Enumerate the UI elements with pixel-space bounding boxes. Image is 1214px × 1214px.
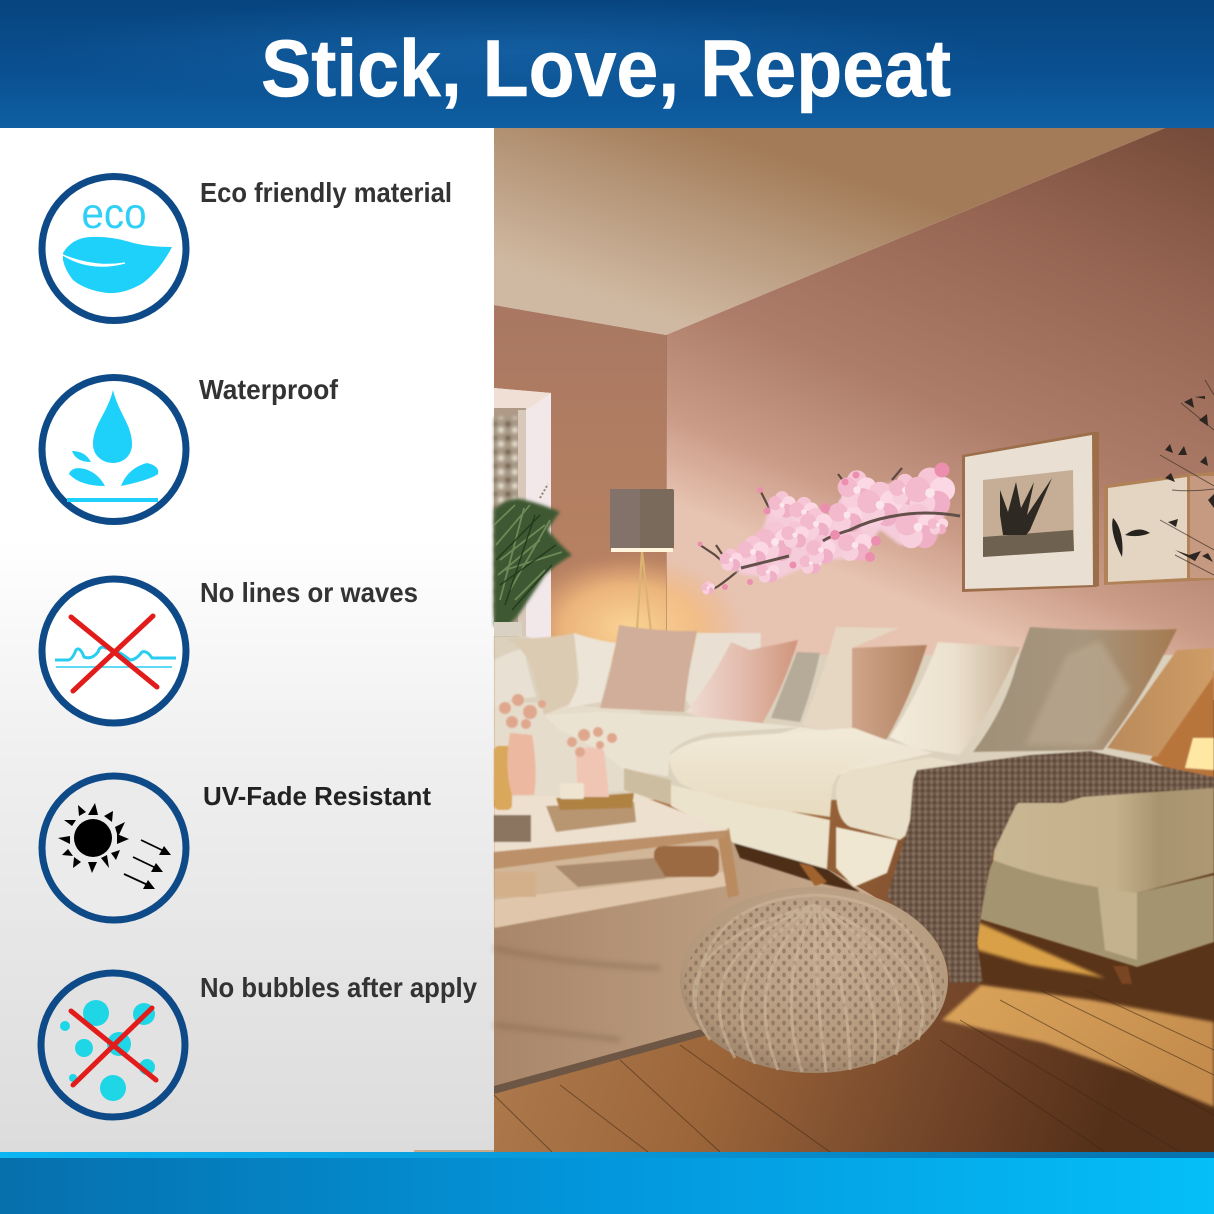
- pillow tan: [852, 645, 927, 742]
- potted plant: [494, 484, 572, 636]
- pillow white: [567, 633, 616, 708]
- blossom branch: [700, 468, 960, 592]
- knit pouf: [680, 887, 948, 1073]
- pouf ribs: [694, 895, 935, 1072]
- small tan edge at panel bottom: [414, 1150, 494, 1152]
- feature: no bubbles: [41, 972, 477, 1117]
- feature: UV-fade resistant: [42, 776, 431, 920]
- pillow tan knit: [600, 625, 697, 712]
- header band: [0, 0, 1214, 128]
- room photo: [494, 128, 1214, 1152]
- knit throw blanket: [887, 751, 1214, 983]
- third seat cushion: [836, 757, 990, 840]
- sunlight beam on floor: [942, 985, 1214, 1107]
- framed picture large: [962, 432, 1099, 592]
- floor planks: [494, 990, 1214, 1152]
- coffee table: [494, 694, 739, 928]
- sofa right back: [1150, 670, 1214, 790]
- seat cushion left: [544, 712, 800, 776]
- box on shelf: [494, 872, 536, 897]
- pink vase two: [576, 748, 609, 797]
- upper cream strip: [760, 727, 933, 776]
- room left wall: [494, 305, 666, 720]
- room ceiling: [494, 128, 1165, 335]
- table edge: [494, 830, 729, 869]
- corner shadow line: [666, 335, 668, 640]
- title: Stick, Love, Repeat: [261, 24, 951, 114]
- small candle: [560, 783, 584, 799]
- decorative tree on wall: [1160, 380, 1214, 575]
- pink vase: [507, 733, 536, 795]
- chaise foot: [1113, 966, 1132, 984]
- pillow white behind: [684, 633, 761, 707]
- rug: [494, 830, 880, 1094]
- table top: [494, 793, 729, 852]
- dried flowers: [499, 694, 617, 757]
- cherry blossom wall decal: [698, 462, 960, 594]
- icon: sun rays: [42, 776, 186, 920]
- back cushion grey: [771, 652, 820, 722]
- pillow cream left: [504, 633, 579, 715]
- chaise base: [973, 860, 1214, 967]
- branch front stroke: [741, 513, 960, 568]
- chaise base lit patch: [1097, 880, 1137, 960]
- label: no lines or waves: No lines or waves: [200, 577, 418, 608]
- icon: no waves: [42, 579, 186, 723]
- floor: [494, 700, 1214, 1152]
- table under space: [494, 832, 732, 902]
- pillow golden: [1107, 648, 1214, 757]
- chaise seat: [993, 778, 1214, 893]
- pillow greige knit: [973, 627, 1177, 752]
- sofa: [494, 625, 1214, 984]
- icon: eco leaf: eco: [82, 190, 146, 238]
- small table lamp glow: [1185, 738, 1214, 770]
- books on shelf: [555, 858, 666, 887]
- table legs: [717, 828, 739, 898]
- dark shadow under sofa: [900, 860, 1214, 1030]
- icon: no bubbles: [41, 973, 185, 1117]
- pillow pink: [686, 640, 798, 724]
- framed picture small: [1104, 472, 1214, 585]
- low left seat behind table: [494, 700, 640, 800]
- feature: eco friendly: [42, 176, 452, 320]
- label: no bubbles: No bubbles after apply: [200, 972, 477, 1003]
- pillow white left: [494, 648, 536, 707]
- tray: [556, 793, 634, 810]
- sofa base left: [624, 768, 671, 805]
- front seat cushion: [670, 728, 900, 817]
- table lower shelf: [494, 871, 732, 928]
- left books: [494, 815, 531, 842]
- panel: features background: [0, 128, 494, 1152]
- base right: [836, 827, 898, 887]
- footer band: [0, 1152, 1214, 1214]
- gold bottle: [494, 746, 512, 810]
- room right wall: [666, 128, 1214, 720]
- golden light patch under sofa: [973, 920, 1105, 978]
- dark gap under sofa: [734, 843, 860, 892]
- label: waterproof: Waterproof: [199, 374, 339, 405]
- sofa feet: [799, 863, 827, 886]
- blossom buds: [698, 462, 950, 590]
- blossom fill mass: [720, 478, 950, 578]
- base middle: [671, 785, 830, 869]
- pillow cream behind tan: [802, 627, 899, 738]
- icon: water drop: [42, 378, 186, 522]
- feature: no lines or waves: [42, 577, 418, 723]
- label: UV-fade resistant: UV-Fade Resistant: [203, 781, 431, 811]
- sofa back: [494, 636, 1214, 800]
- window: [494, 388, 551, 640]
- feature: waterproof: [42, 374, 339, 522]
- basket: [654, 846, 719, 877]
- books on table: [546, 802, 636, 832]
- floor lamp: [610, 489, 674, 632]
- icon: eco leaf: [42, 176, 186, 320]
- label: eco friendly: Eco friendly material: [200, 177, 452, 208]
- wall lamp glow: [518, 556, 742, 700]
- pillow lit patch: [1025, 640, 1130, 745]
- pillow cream: [890, 642, 1020, 755]
